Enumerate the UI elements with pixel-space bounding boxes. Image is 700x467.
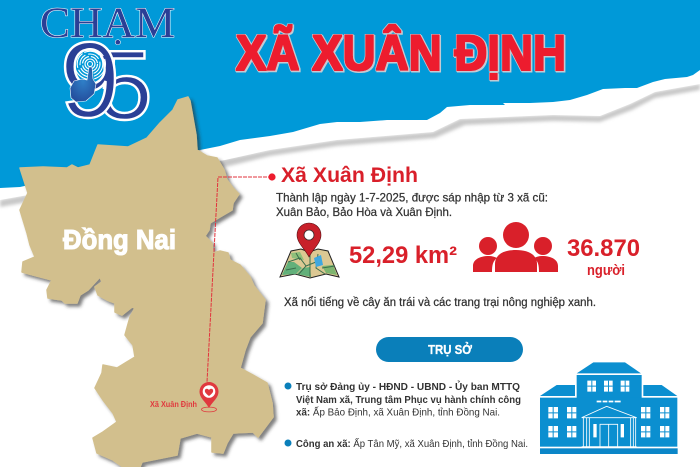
stat: population (567, 235, 640, 279)
bullet: police: Công an xã: Ấp Tân Mỹ, xã Xuân Định, tỉnh Đồng Nai. (296, 437, 528, 450)
logo word: CHẠM (40, 0, 175, 47)
bullet: party office (284, 380, 521, 418)
torn paper white strip (0, 70, 700, 200)
intro text: Thành lập ngày 1-7-2025, được sáp nhập từ 3 xã cũ: (276, 190, 548, 204)
icon: headquarters building (540, 362, 678, 454)
heading pill: Trụ sở (376, 337, 523, 362)
icon: location pin on map (200, 382, 218, 412)
icon: fingerprint (74, 48, 106, 80)
province shape (20, 97, 273, 467)
map label: Đồng Nai: Đồng Nai (63, 224, 176, 255)
bullet: party office: Trụ sở Đảng ủy - HĐND - UBND - Ủy ban MTTQ (296, 380, 520, 393)
bullet: party office: Việt Nam xã, Trung tâm Phục vụ hành chính công (296, 394, 521, 406)
icon: folded map with pin (280, 223, 339, 278)
connector line (207, 173, 276, 382)
map label: Xã Xuân Định: Xã Xuân Định (150, 400, 197, 409)
heading pill: Trụ sở: TRỤ SỞ (428, 342, 473, 357)
stat: area: 52,29 km² (349, 242, 457, 269)
blue header background (0, 0, 700, 188)
logo: Chạm 95 (40, 0, 175, 140)
map of Đồng Nai (20, 97, 273, 467)
logo digit 9: 9 (60, 19, 120, 140)
main title: XÃ XUÂN ĐỊNH (236, 25, 566, 81)
stat: population: người (587, 263, 625, 279)
icon: pointing hand (70, 67, 96, 102)
headquarters list (284, 380, 528, 450)
bullet: party office: xã: Ấp Bảo Định, xã Xuân Định, tỉnh Đồng Nai. (296, 406, 500, 418)
torn paper shadow (0, 84, 700, 207)
intro text: Xuân Bảo, Bảo Hòa và Xuân Định. (276, 205, 452, 219)
section heading: Xã Xuân Định (281, 164, 418, 187)
intro text (276, 190, 548, 219)
icon: people (473, 222, 558, 272)
stat: population: 36.870 (567, 235, 640, 262)
logo digit 5: 5 (98, 30, 153, 140)
description text: Xã nổi tiếng về cây ăn trái và các trang trại nông nghiệp xanh. (284, 297, 596, 309)
